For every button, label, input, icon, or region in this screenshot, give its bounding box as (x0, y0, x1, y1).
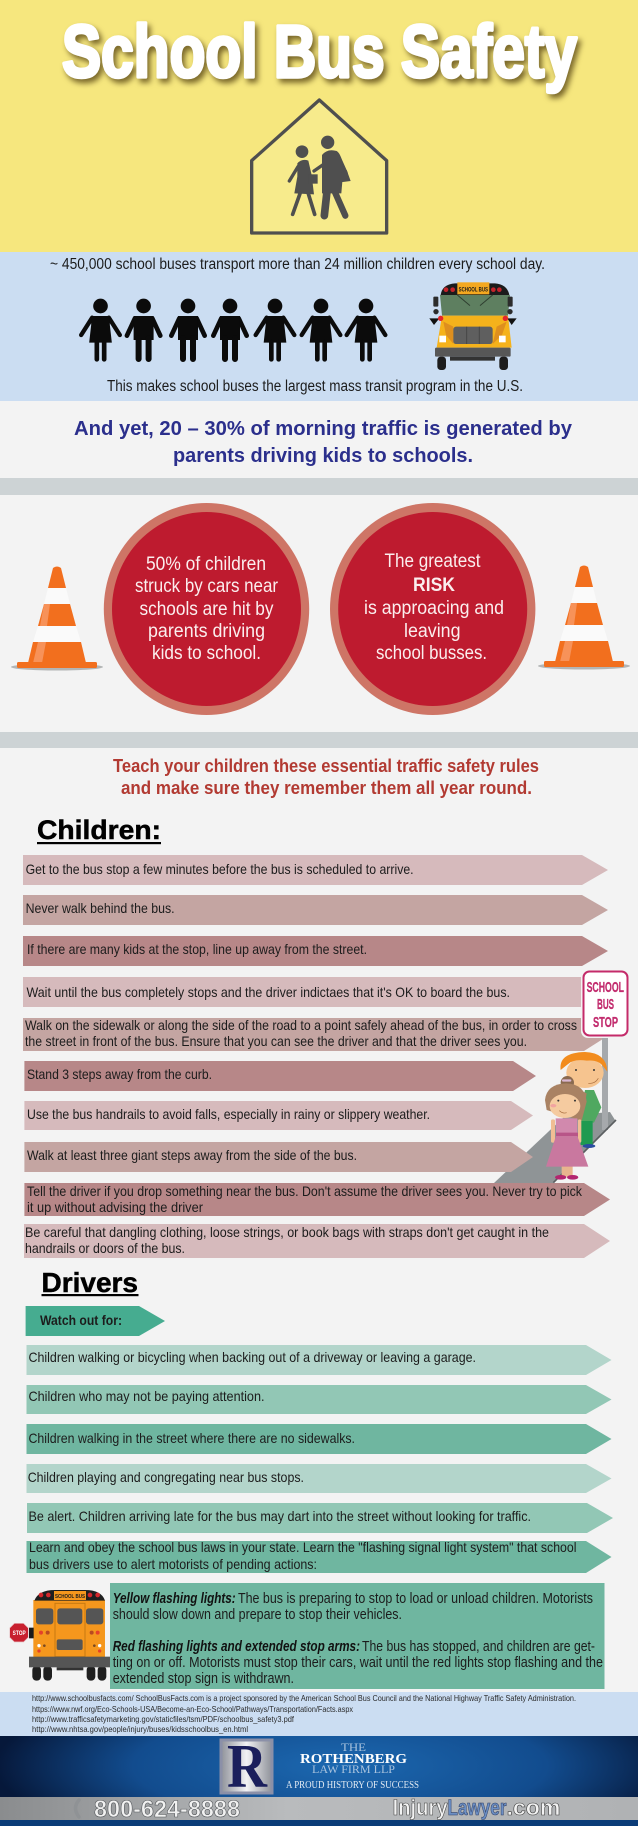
icon: school bus front: SCHOOL BUS (459, 287, 488, 294)
text: website: Lawyer (448, 1795, 507, 1820)
heading: teach your children: Teach your children these essential traffic safety rules (113, 756, 539, 776)
arrow: never walk behind: Never walk behind the bus. (26, 900, 175, 916)
icon: school crossing sign (252, 100, 387, 233)
heading: morning traffic (74, 417, 573, 467)
panel: flashing lights explanation: Red flashing lights and extended stop arms: (113, 1639, 360, 1655)
heading: morning traffic: parents driving kids to schools. (173, 444, 473, 467)
icon: phone (76, 1800, 79, 1817)
text: firm name: LAW FIRM LLP (312, 1764, 395, 1776)
icon: school bus rear with stop arm (10, 1590, 110, 1681)
text: website: .com (506, 1795, 560, 1820)
icon: school bus stop sign (581, 969, 630, 1130)
arrow: not paying attention (26, 1385, 612, 1414)
icon: school bus rear with stop arm: STOP (13, 1631, 26, 1637)
panel: circle, children struck (104, 503, 309, 715)
arrow: be alert (27, 1503, 613, 1533)
arrow: giant steps: Walk at least three giant steps away from the side of the bus. (27, 1147, 357, 1163)
arrow: backing out: Children walking or bicycling when backing out of a driveway or leaving a garage. (28, 1349, 476, 1365)
heading: teach your children: and make sure they remember them all year round. (121, 778, 532, 798)
arrow: line up: If there are many kids at the stop, line up away from the street. (27, 941, 367, 957)
divider band top (0, 478, 638, 495)
text: firm name: ROTHENBERG (300, 1752, 407, 1767)
heading: teach your children (113, 756, 539, 798)
arrow: walk on the sidewalk: Walk on the sidewalk or along the side of the road to a point safely ahead of the bus, in order to cross (25, 1017, 577, 1033)
panel: header (0, 0, 638, 252)
panel: contact bar (0, 1795, 638, 1823)
panel: circle, children struck: kids to school. (152, 643, 261, 664)
panel: circle, greatest risk: school busses. (376, 643, 487, 664)
logo: R monogram: R (227, 1733, 268, 1801)
panel: circle, children struck: parents driving (148, 621, 265, 642)
icon: school bus stop sign: BUS (597, 996, 614, 1013)
icon: school bus front (429, 282, 517, 370)
arrow: obey bus laws (26, 1539, 612, 1573)
panel: flashing lights explanation: extended stop sign is withdrawn. (113, 1671, 294, 1687)
arrow: walk on the sidewalk: the street in front of the bus. Ensure that you can see the driver and that the driver sees you. (25, 1033, 527, 1049)
icon: right traffic cone (538, 566, 630, 670)
panel: circle, children struck: struck by cars near (135, 576, 279, 597)
text: firm name: A PROUD HISTORY OF SUCCESS (286, 1780, 419, 1791)
panel: sources: http://www.nhtsa.gov/people/injury/buses/kidsschoolbus_en.html (32, 1724, 248, 1734)
arrow: watch out for: Watch out for: (40, 1313, 122, 1328)
heading: morning traffic: And yet, 20 – 30% of morning traffic is generated by (74, 417, 573, 440)
panel: bus statistics (0, 252, 638, 401)
text: bus count: ~ 450,000 school buses transport more than 24 million children every school day. (50, 256, 545, 273)
arrow: near bus stops (26, 1464, 612, 1493)
arrow: dangling clothing: Be careful that dangling clothing, loose strings, or book bags with straps don't get caught in the (25, 1224, 549, 1240)
panel: circle, greatest risk (330, 503, 535, 715)
text: website: Injury (393, 1795, 448, 1820)
arrow: dangling clothing: handrails or doors of the bus. (25, 1240, 185, 1256)
arrow: giant steps (24, 1142, 533, 1172)
arrow: not paying attention: Children who may not be paying attention. (28, 1388, 264, 1404)
arrow: stand 3 steps: Stand 3 steps away from the curb. (27, 1066, 212, 1082)
panel: circle, greatest risk: is approacing and (364, 598, 504, 619)
text: phone number: 800-624-8888 (94, 1796, 240, 1823)
panel: sources: https://www.nwf.org/Eco-Schools-USA/Become-an-Eco-School/Pathways/Transportation/Facts.aspx (32, 1704, 354, 1714)
arrow: dangling clothing (24, 1224, 610, 1258)
heading: children: Children: (37, 815, 161, 845)
footer base strip (0, 1820, 638, 1826)
panel: sources (0, 1692, 638, 1736)
panel: circle, greatest risk: RISK (413, 575, 455, 596)
arrow: backing out (26, 1345, 612, 1375)
text: largest mass transit: This makes school buses the largest mass transit program in the U.S. (107, 378, 523, 395)
icon: row of children (81, 299, 385, 359)
arrow: watch out for (26, 1306, 165, 1336)
arrow: line up (23, 936, 608, 966)
panel: flashing lights explanation: Yellow flashing lights: (113, 1591, 236, 1607)
panel: flashing lights explanation: The bus has stopped, and children are get- (362, 1639, 595, 1655)
arrow: wait until bus stops: Wait until the bus completely stops and the driver indictaes that it's OK to board the bus. (26, 984, 510, 1000)
panel: circle, greatest risk: leaving (404, 621, 460, 642)
panel: flashing lights explanation: should slow down and prepare to stop their vehicles. (113, 1607, 402, 1623)
arrow: handrails: Use the bus handrails to avoid falls, especially in rainy or slippery weather. (27, 1106, 430, 1122)
arrow: walk on the sidewalk (23, 1017, 610, 1051)
arrow: obey bus laws: Learn and obey the school bus laws in your state. Learn the "flashing signal light system" that school (29, 1539, 576, 1555)
panel: flashing lights explanation (110, 1583, 604, 1689)
arrow: obey bus laws: bus drivers use to alert motorists of pending actions: (29, 1556, 317, 1572)
arrow: near bus stops: Children playing and congregating near bus stops. (28, 1469, 304, 1485)
arrow: get to the stop (23, 855, 608, 885)
heading: drivers: Drivers (42, 1267, 138, 1298)
illustration: two children at the bus stop (545, 1052, 616, 1183)
text: firm name: THE (341, 1740, 366, 1754)
panel: circle, children struck: schools are hit by (140, 599, 274, 620)
arrow: stand 3 steps (24, 1061, 536, 1091)
icon: school bus stop sign: STOP (593, 1014, 618, 1031)
arrow: wait until bus stops (23, 977, 608, 1007)
arrow: handrails (24, 1101, 533, 1130)
arrow: get to the stop: Get to the bus stop a few minutes before the bus is scheduled to arrive. (26, 861, 414, 877)
panel: circle, greatest risk: The greatest (384, 551, 481, 572)
text: website (393, 1795, 560, 1820)
icon: left traffic cone (11, 566, 103, 670)
arrow: never walk behind (23, 895, 608, 925)
arrow: no sidewalks: Children walking in the street where there are no sidewalks. (28, 1430, 355, 1446)
panel: circle, children struck: 50% of children (146, 554, 266, 575)
arrow: be alert: Be alert. Children arriving late for the bus may dart into the street without looking for traffic. (28, 1508, 531, 1524)
panel: law firm footer (0, 1733, 638, 1801)
icon: school bus rear with stop arm: SCHOOL BUS (55, 1594, 85, 1600)
arrow: no sidewalks (26, 1424, 612, 1454)
arrow: tell the driver: Tell the driver if you drop something near the bus. Don't assume the driver sees you. Never try to pick (27, 1183, 583, 1199)
divider band bottom (0, 732, 638, 748)
text: firm name (286, 1740, 419, 1791)
arrow: tell the driver (24, 1183, 610, 1216)
illustration: sidewalk (494, 1112, 615, 1183)
arrow: tell the driver: it up without advising the driver (27, 1199, 203, 1215)
panel: sources: http://www.trafficsafetymarketing.gov/staticfiles/tsm/PDF/schoolbus_safety3.pdf (32, 1714, 295, 1724)
